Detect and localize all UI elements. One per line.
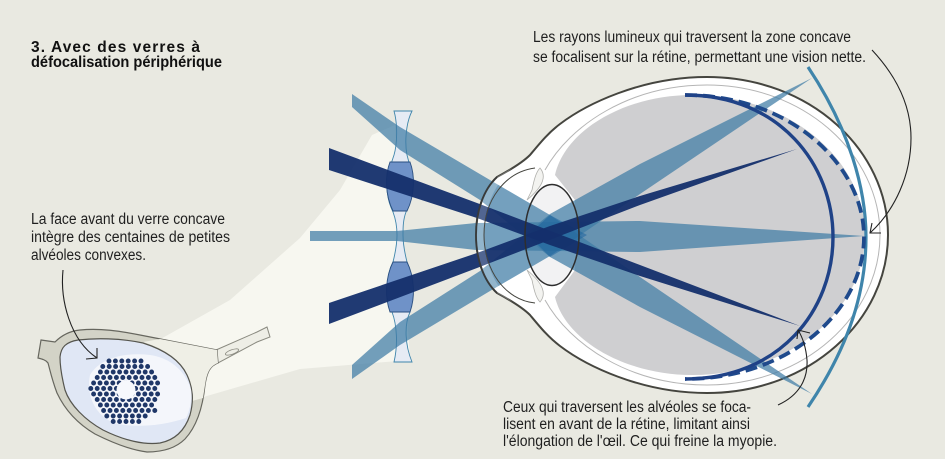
ray: top dark beam <box>329 148 800 326</box>
eye: vitreous <box>555 95 865 375</box>
crystalline lens outline <box>525 184 579 286</box>
light rays <box>310 78 864 394</box>
spectacle lens cross-section <box>387 111 413 362</box>
icon: lens <box>60 339 192 443</box>
ray: bottom dark beam <box>329 149 797 324</box>
retina: solid arc <box>685 95 833 379</box>
title: 3. Avec des verres à <box>31 39 200 56</box>
arrow: to the focal point <box>778 330 810 405</box>
icon: temple arm <box>216 327 270 363</box>
eye <box>476 77 888 393</box>
ray: central beam <box>310 221 864 252</box>
convex cell: bottom <box>387 262 413 312</box>
glasses <box>38 327 270 452</box>
text: lens front face annotation: La face avant du verre concave <box>31 211 225 228</box>
text: concave zone annotation <box>533 29 866 66</box>
eye: inner ring <box>545 85 880 385</box>
eye: sclera <box>476 77 888 393</box>
arrow: to the lens <box>62 270 97 359</box>
eye: iris <box>527 168 543 302</box>
cornea: inner edge <box>484 168 535 303</box>
retina: dashed arc <box>685 95 864 379</box>
cornea: outer edge <box>476 177 497 293</box>
arrow: to the retina <box>870 50 911 233</box>
ray: bottom light beam <box>352 78 812 379</box>
eye: crystalline lens fill <box>525 184 579 286</box>
text: lens front face annotation: alvéoles convexes. <box>31 247 146 264</box>
icon: central clear zone <box>116 380 136 400</box>
text: lens front face annotation: intègre des centaines de petites <box>31 229 230 246</box>
text: concave zone annotation: se focalisent sur la rétine, permettant une vision nette. <box>533 49 866 66</box>
lens body <box>387 111 412 362</box>
title: défocalisation périphérique <box>31 54 222 71</box>
text: convex cells annotation <box>503 399 777 450</box>
icon: frame lightened by the light cone <box>143 339 218 401</box>
light cone from glasses to lens <box>150 125 410 398</box>
icon: temple slot <box>225 348 239 356</box>
cornea: highlight band <box>476 168 512 302</box>
icon: lens bright zone <box>89 354 191 426</box>
icon: convex cell dots <box>91 361 161 422</box>
title <box>31 39 222 71</box>
convex cell: top <box>387 162 413 211</box>
ray: top light beam <box>352 94 812 394</box>
icon: frame <box>38 329 218 452</box>
text: convex cells annotation: lisent en avant de la rétine, limitant ainsi <box>503 416 750 433</box>
text: lens front face annotation <box>31 211 230 264</box>
ray: crossing diamond <box>528 215 587 257</box>
text: concave zone annotation: Les rayons lumineux qui traversent la zone concave <box>533 29 851 46</box>
cornea <box>476 168 535 303</box>
text: convex cells annotation: Ceux qui traversent les alvéoles se foca- <box>503 399 751 416</box>
text: convex cells annotation: l'élongation de l'œil. Ce qui freine la myopie. <box>503 433 777 450</box>
retina: image plane arc <box>808 67 866 407</box>
